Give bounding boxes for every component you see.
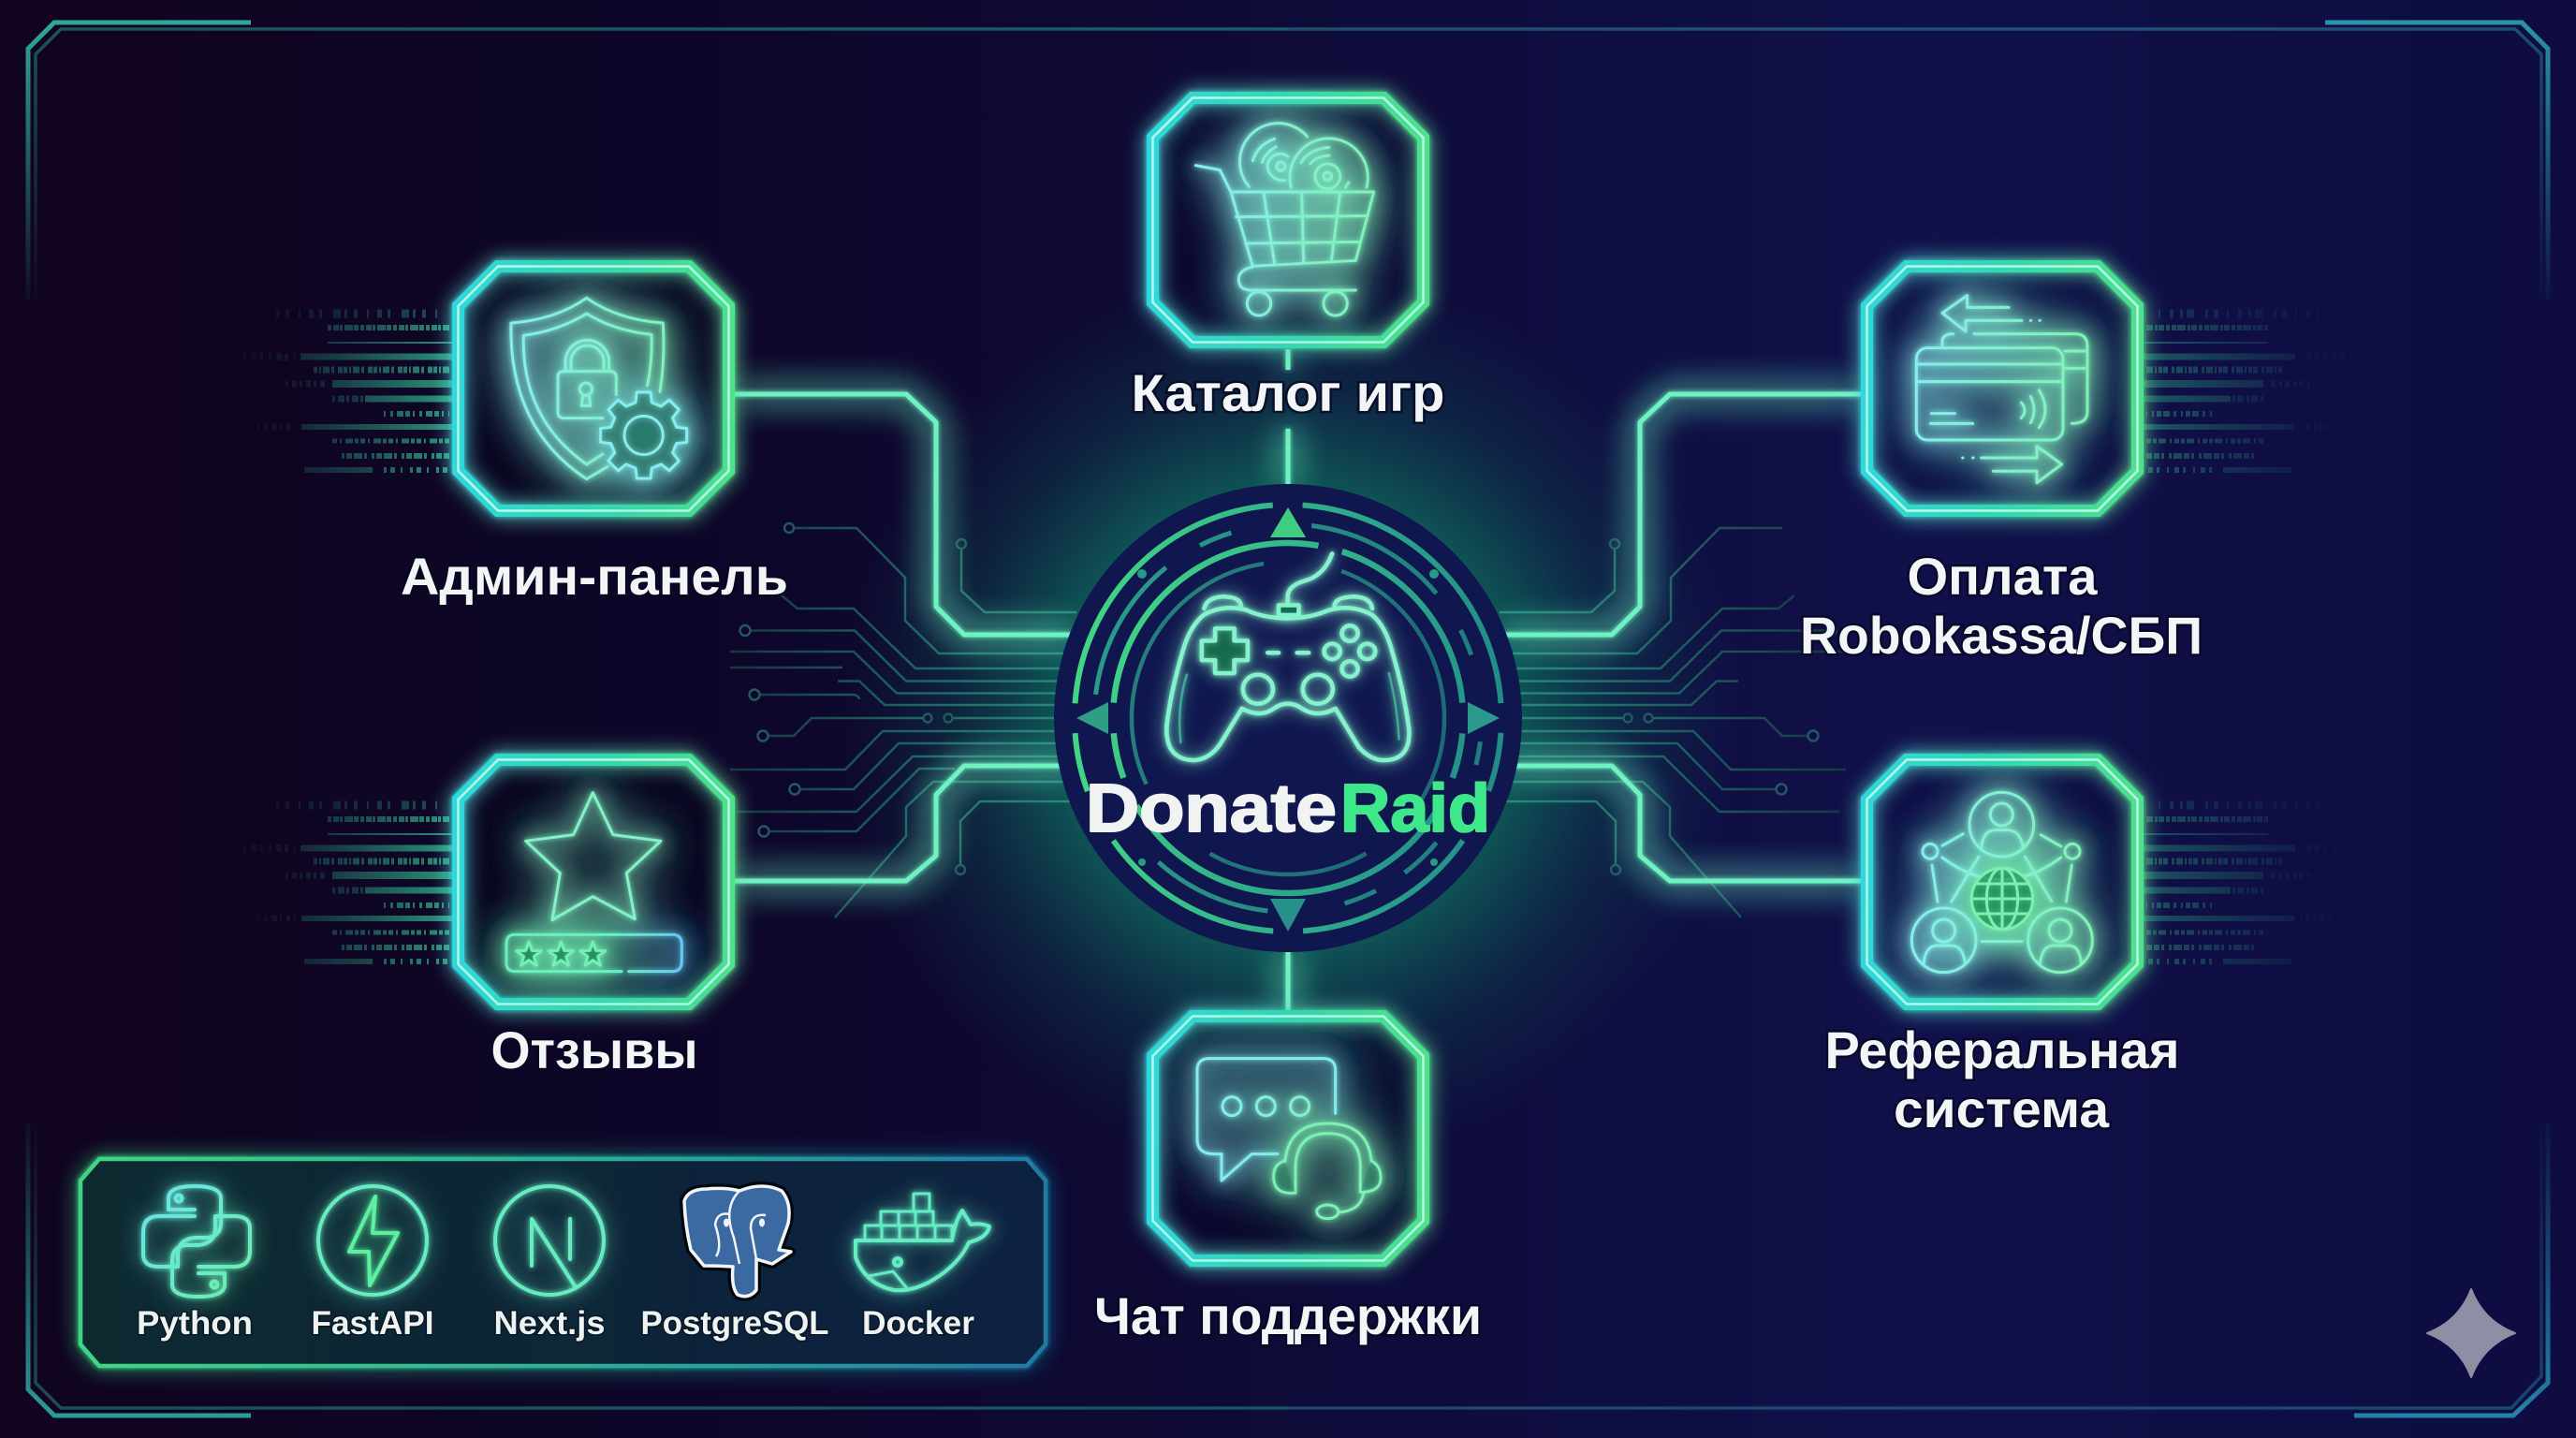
- panel: catalog card: [1153, 97, 1423, 343]
- heading: payment label: [1800, 547, 2203, 665]
- icon: docker: [856, 1194, 989, 1290]
- heading: admin label: Админ-панель: [401, 547, 788, 606]
- heading: support label: Чат поддержки: [1094, 1286, 1482, 1345]
- card frame: support: [1153, 1017, 1423, 1260]
- icon: shield with lock and gear: [511, 298, 687, 479]
- heading: catalog label: Каталог игр: [1131, 363, 1445, 422]
- icon: referral network: [1911, 792, 2092, 973]
- hub disc: [1054, 484, 1522, 952]
- arrow: top: [1270, 507, 1306, 537]
- icon: star and rating bar: [506, 793, 681, 972]
- panel: support card: [1153, 1017, 1423, 1260]
- arrow: left: [1076, 702, 1108, 734]
- connector lines: [735, 349, 1861, 1010]
- heading: referral label: система: [1894, 1079, 2110, 1138]
- icon: python: [143, 1186, 250, 1297]
- card frame: admin: [459, 266, 728, 511]
- panel: admin card: [459, 266, 728, 511]
- circuit traces left: [730, 523, 1076, 917]
- card fill: payment: [1866, 266, 2138, 511]
- icon: nextjs: [495, 1186, 604, 1295]
- panel: central hub: [1054, 484, 1522, 952]
- panel: tech stack legend: [80, 1159, 1046, 1366]
- card fill: referral: [1866, 760, 2138, 1004]
- label: Docker: Docker: [862, 1305, 974, 1342]
- title: DonateRaid: Donate: [1086, 771, 1337, 846]
- label: FastAPI: FastAPI: [311, 1305, 434, 1342]
- panel: referral card: [1866, 760, 2138, 1004]
- title: DonateRaid: [1086, 771, 1490, 846]
- hub knobs: [1137, 569, 1439, 866]
- panel: payment card: [1866, 266, 2138, 511]
- legend frame: [80, 1159, 1046, 1366]
- card frame: referral: [1866, 760, 2138, 1004]
- circuit traces right: [1500, 528, 1846, 917]
- title: DonateRaid: Raid: [1340, 771, 1490, 846]
- card frame: reviews: [459, 760, 728, 1004]
- heading: payment label: Оплата: [1908, 547, 2098, 606]
- hub rings: [1061, 491, 1515, 946]
- arrow: right: [1468, 702, 1500, 734]
- icon: payment cards and arrows: [1916, 296, 2087, 483]
- heading: referral label: Реферальная: [1825, 1020, 2179, 1079]
- icon: postgresql: [684, 1186, 791, 1297]
- card fill: admin: [459, 266, 728, 511]
- arrow: bottom: [1270, 899, 1306, 932]
- card fill: reviews: [459, 760, 728, 1004]
- card frame: payment: [1866, 266, 2138, 511]
- label: Next.js: Next.js: [494, 1305, 605, 1342]
- heading: reviews label: Отзывы: [490, 1020, 698, 1079]
- heading: referral label: [1825, 1020, 2179, 1138]
- icon: chat bubble and headset: [1197, 1059, 1381, 1219]
- card frame: catalog: [1153, 97, 1423, 343]
- icon: fastapi: [318, 1186, 427, 1295]
- card fill: catalog: [1153, 97, 1423, 343]
- label: PostgreSQL: PostgreSQL: [640, 1305, 829, 1342]
- card fill: support: [1153, 1017, 1423, 1260]
- heading: payment label: Robokassa/СБП: [1800, 606, 2203, 665]
- icon: cart with discs: [1195, 124, 1374, 315]
- icon: sparkle watermark: [2427, 1289, 2515, 1377]
- panel: reviews card: [459, 760, 728, 1004]
- icon: gamepad: [1166, 553, 1409, 760]
- label: Python: Python: [137, 1305, 253, 1342]
- data strips beside cards: [243, 314, 2352, 961]
